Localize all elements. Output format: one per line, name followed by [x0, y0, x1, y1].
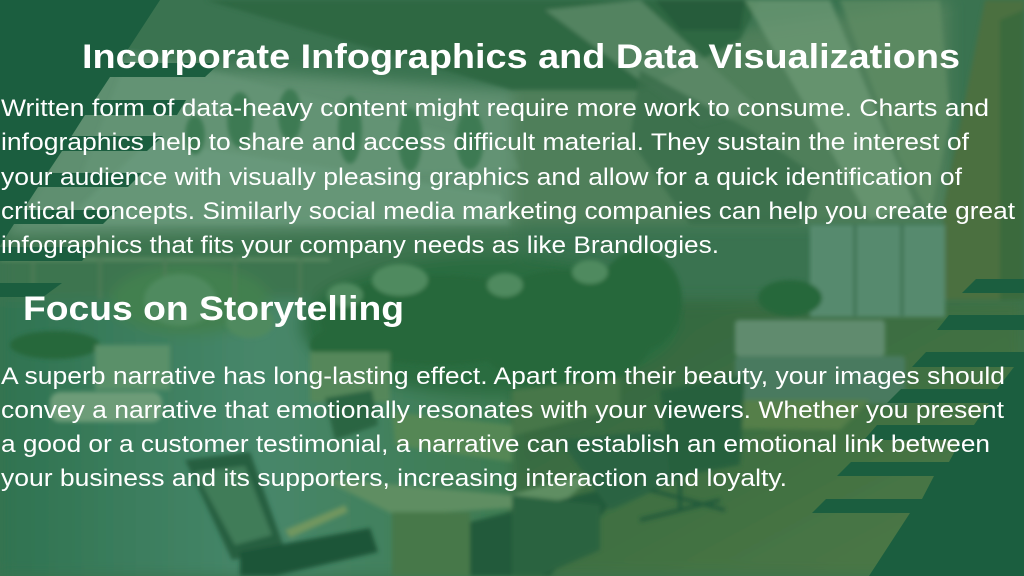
wood wall	[940, 0, 1024, 300]
paragraph: storytelling	[1, 363, 1005, 492]
paragraph: infographics: critical concepts. Similarly social media marketing companies can help you create great	[1, 198, 1015, 225]
paragraph: infographics: Written form of data-heavy content might require more work to consume. Charts and	[1, 95, 989, 122]
paragraph: storytelling: your business and its supporters, increasing interaction and loyalty.	[1, 465, 787, 492]
paragraph: storytelling: a good or a customer testimonial, a narrative can establish an emotional link between	[1, 431, 990, 458]
paragraph: infographics: infographics help to share and access difficult material. They sustain the interest of	[1, 129, 969, 156]
desks	[320, 470, 600, 515]
paragraph: storytelling: convey a narrative that emotionally resonates with your viewers. Whether you present	[1, 397, 1004, 424]
heading: storytelling: Focus on Storytelling	[23, 290, 404, 328]
decorative shape: top-left striped corner	[0, 0, 220, 297]
plants	[10, 250, 822, 390]
windows	[810, 225, 945, 317]
title: Incorporate Infographics and Data Visualizations	[82, 38, 960, 76]
wall behind, left	[0, 258, 330, 261]
paragraph: storytelling: A superb narrative has long-lasting effect. Apart from their beauty, your images should	[1, 363, 1005, 390]
paragraph: infographics	[1, 95, 1015, 259]
sofa	[735, 320, 885, 356]
paragraph: infographics: infographics that fits your company needs as like Brandlogies.	[1, 232, 719, 259]
chairs	[185, 452, 285, 560]
paragraph: infographics: your audience with visually pleasing graphics and allow for a quick identification of	[1, 164, 962, 191]
decorative shape: bottom-right striped corner	[812, 279, 1024, 576]
planters	[50, 392, 162, 422]
ceiling	[205, 0, 760, 90]
